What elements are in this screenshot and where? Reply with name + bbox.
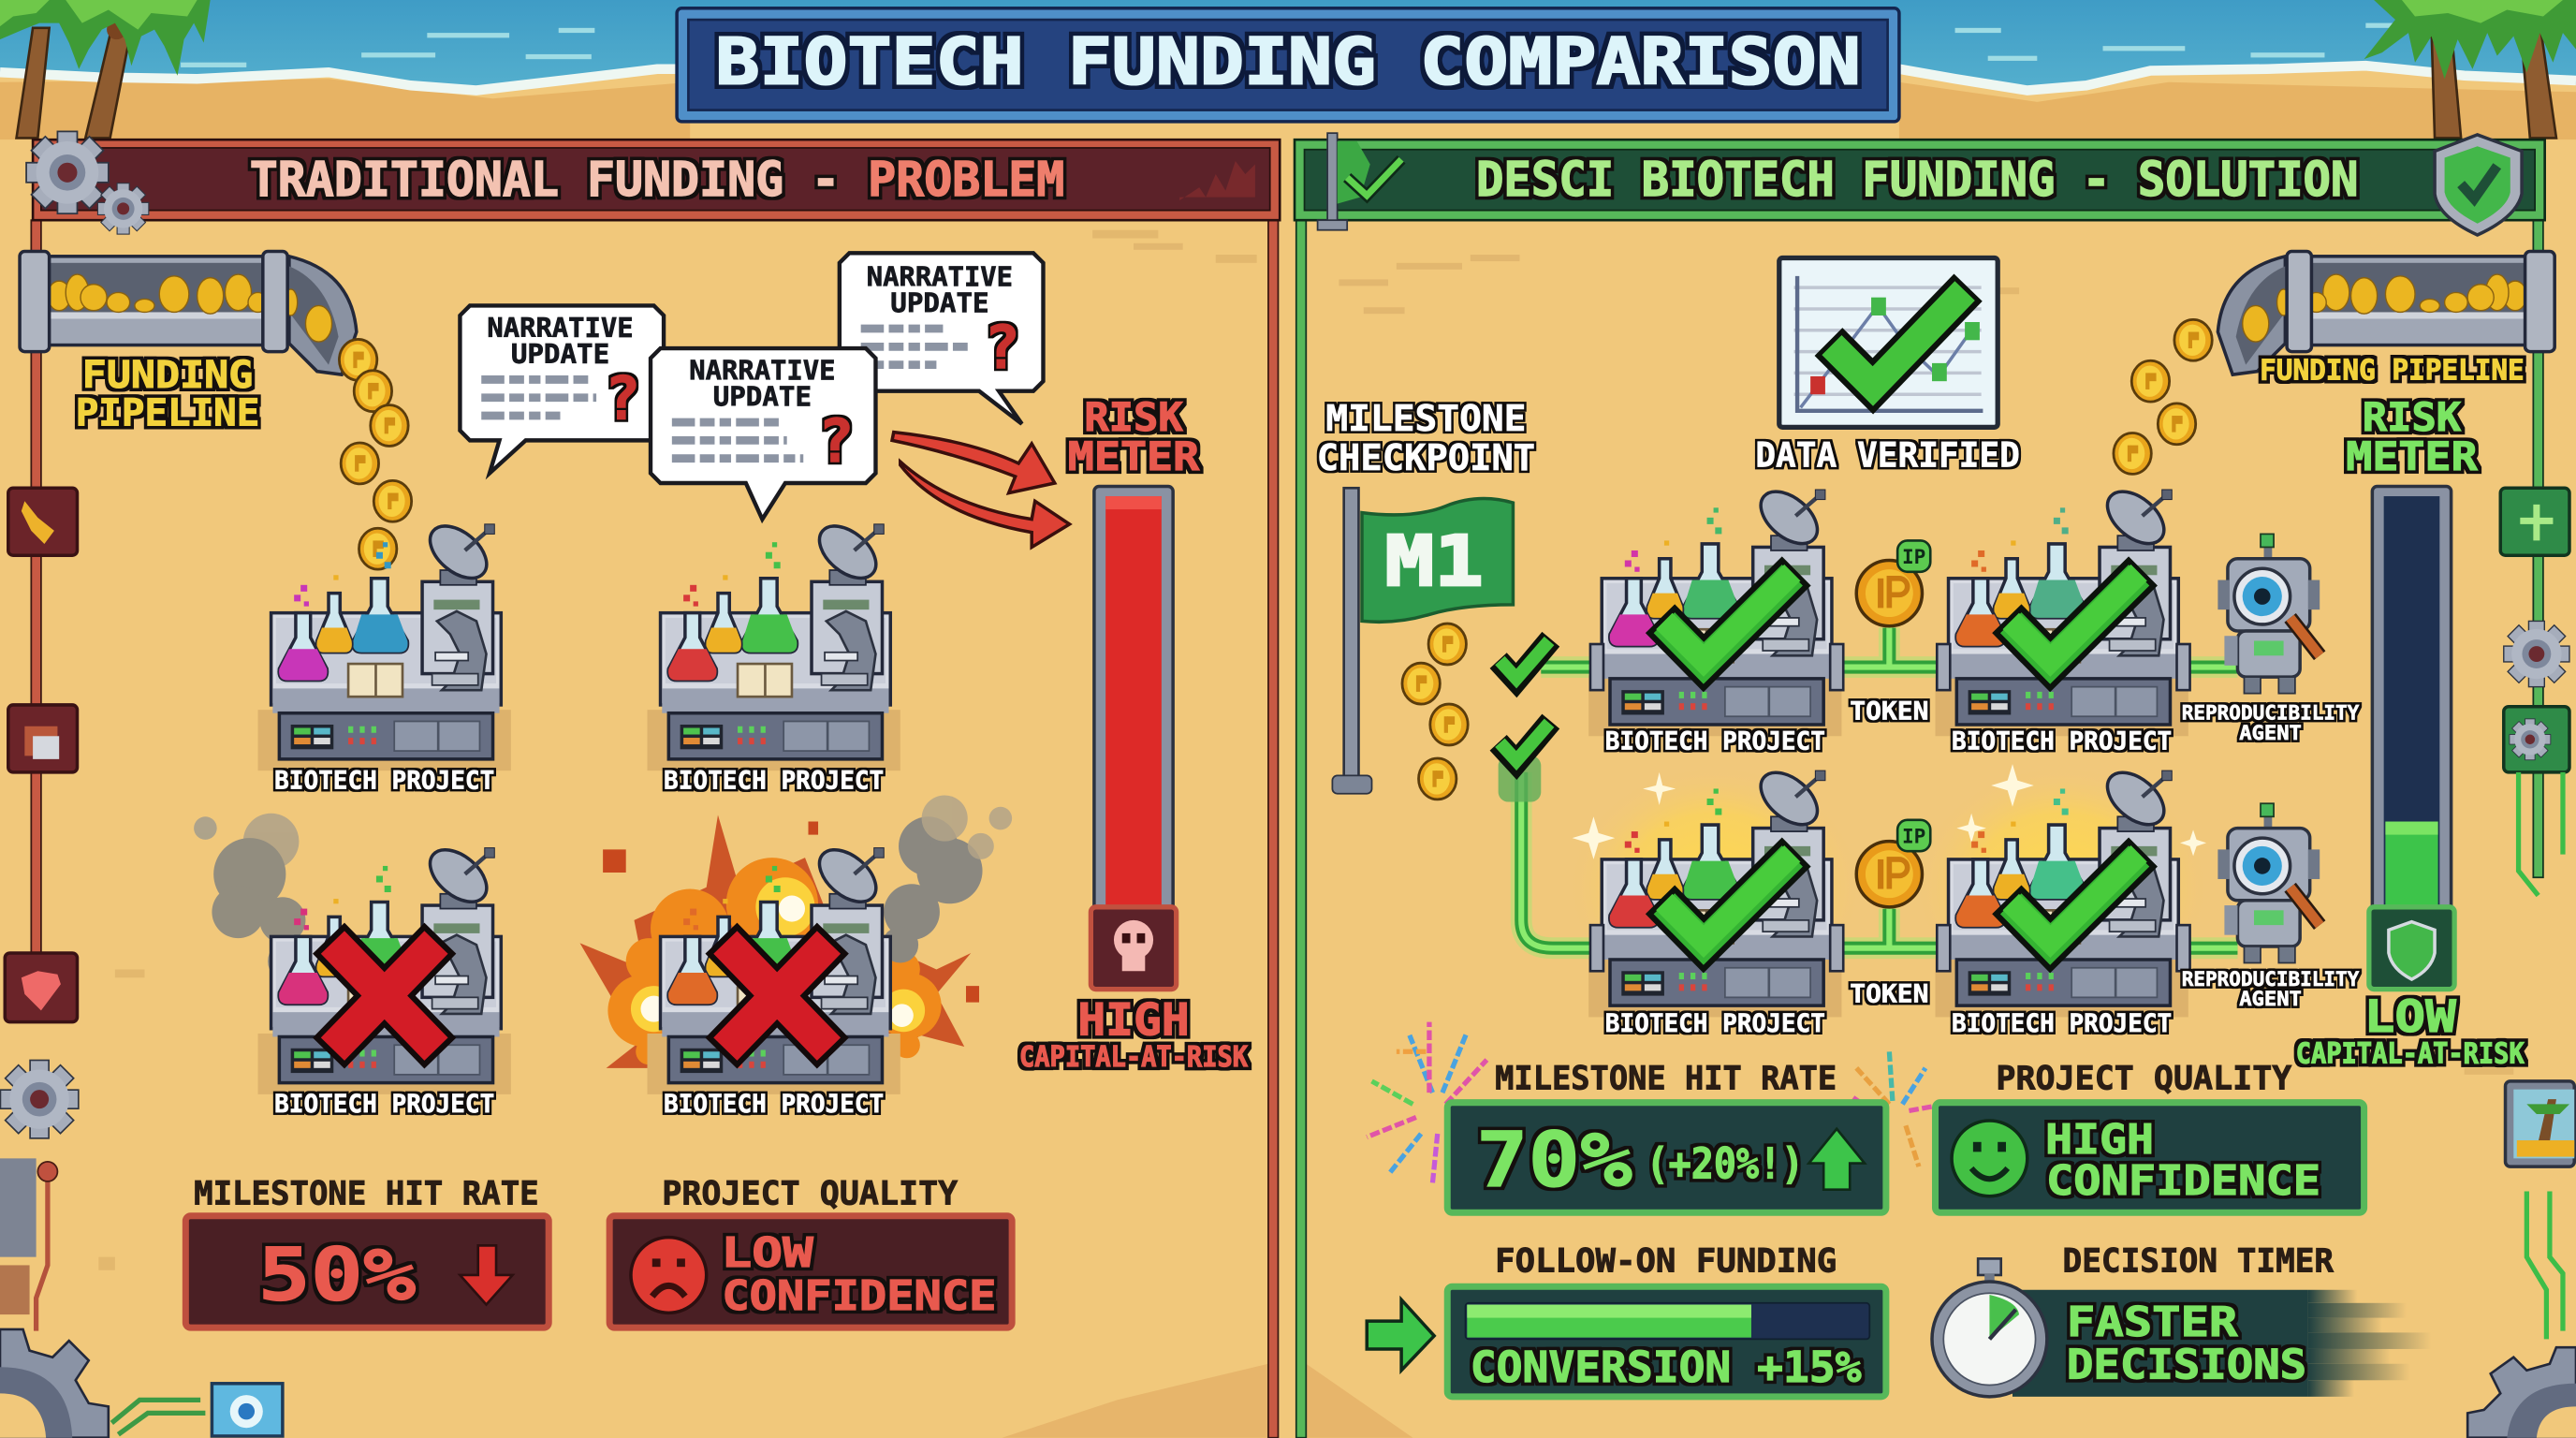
label: BIOTECH PROJECT — [274, 767, 494, 795]
skull icon box — [1090, 907, 1177, 990]
risk result left — [1019, 995, 1248, 1074]
darker sand corners — [1003, 1364, 1412, 1438]
funding pipeline label left — [76, 353, 259, 435]
gears on left header — [26, 131, 149, 234]
robot label row 1: REPRODUCIBILITY — [2182, 701, 2360, 725]
narrative bubble left — [460, 305, 664, 473]
metric: follow-on funding: CONVERSION +15% — [1471, 1343, 1862, 1392]
metric: project quality left: CONFIDENCE — [722, 1272, 996, 1320]
label: BIOTECH PROJECT — [1952, 727, 2172, 756]
funding pipeline label left: PIPELINE — [76, 391, 259, 435]
metric: project quality right — [1936, 1060, 2364, 1212]
check — [1661, 852, 1796, 944]
project row 2 b — [1936, 762, 2190, 1038]
palm trees right — [2364, 0, 2576, 138]
narrative bubble back right — [840, 253, 1043, 424]
metric: follow-on funding — [1447, 1241, 1886, 1397]
narrative bubble front: ? — [818, 406, 854, 476]
red x — [329, 938, 440, 1053]
metric: milestone hit rate left: 50% — [258, 1233, 416, 1317]
label: BIOTECH PROJECT — [1952, 1010, 2172, 1038]
metric: milestone hit rate right — [1447, 1060, 1886, 1212]
sand specks — [98, 230, 2513, 1270]
project row 2 a — [1588, 762, 1843, 1038]
metric: milestone hit rate right: 70% — [1476, 1117, 1632, 1205]
narrative bubble left: NARRATIVE — [487, 313, 634, 344]
token label row 2: TOKEN — [1850, 981, 1928, 1009]
metric: project quality left — [609, 1174, 1012, 1328]
shield icon box — [2369, 907, 2454, 990]
metric: decision timer: DECISION TIMER — [2063, 1241, 2334, 1280]
risk meter label left: METER — [1068, 433, 1200, 479]
metric: project quality left: PROJECT QUALITY — [662, 1174, 958, 1212]
data verified chart — [1779, 258, 1998, 427]
narrative bubble back right: ? — [985, 313, 1020, 382]
sad face — [631, 1238, 707, 1313]
robot label row 1: AGENT — [2239, 721, 2302, 744]
narrative bubble back right: NARRATIVE — [867, 261, 1013, 292]
red x — [721, 938, 833, 1053]
funding pipeline label left: FUNDING — [82, 353, 253, 397]
ip token row 2 — [1856, 820, 1930, 907]
metric: decision timer — [1932, 1241, 2432, 1397]
narrative bubble left: ? — [605, 364, 640, 433]
label: BIOTECH PROJECT — [1605, 1010, 1825, 1038]
narrative bubble back right: UPDATE — [890, 287, 989, 318]
label: BIOTECH PROJECT — [1605, 727, 1825, 756]
small check marks — [1499, 639, 1551, 801]
milestone flag m1: M1 — [1385, 522, 1484, 602]
ip token row 1 — [1856, 540, 1930, 626]
narrative bubble front: UPDATE — [713, 382, 812, 413]
smoke and explosion station 4 — [580, 795, 1012, 1068]
check — [2007, 571, 2144, 663]
robot row 2 — [2217, 803, 2320, 962]
ip token row 2: IP — [1902, 824, 1925, 847]
risk meter label right — [2346, 394, 2478, 479]
glow behind lower row — [1567, 764, 2210, 1010]
robot row 1 — [2217, 534, 2320, 694]
check — [2007, 852, 2144, 944]
milestone checkpoint label: MILESTONE — [1325, 398, 1526, 440]
falling coins right — [2114, 319, 2212, 474]
narrative bubble front — [651, 348, 875, 520]
risk meter label right: METER — [2346, 433, 2478, 479]
green connection wires — [1521, 627, 2237, 948]
stopwatch — [1932, 1258, 2047, 1397]
shield icon on header — [2435, 135, 2522, 235]
metric: decision timer: DECISIONS — [2067, 1342, 2306, 1389]
robot label row 2: AGENT — [2239, 987, 2302, 1010]
risk result right: LOW — [2364, 991, 2456, 1043]
risk result left: HIGH — [1077, 995, 1190, 1047]
station 2 — [648, 516, 900, 795]
risk meter bar right — [2369, 487, 2454, 990]
ip token row 1: IP — [1902, 545, 1925, 568]
red arrows to risk meter — [892, 433, 1070, 547]
robot label row 1 — [2182, 701, 2360, 744]
station 1 — [258, 516, 511, 795]
metric: milestone hit rate right: (+20%!) — [1647, 1138, 1804, 1188]
funding pipeline right — [2217, 252, 2554, 374]
metric: milestone hit rate left: MILESTONE HIT RATE — [194, 1174, 539, 1212]
project row 1 a — [1588, 481, 1843, 756]
milestone flag m1 — [1332, 488, 1513, 794]
label: BIOTECH PROJECT — [664, 1091, 884, 1119]
label: BIOTECH PROJECT — [274, 1091, 494, 1119]
project row 1 b — [1936, 481, 2190, 756]
metric: project quality left: LOW — [721, 1229, 814, 1277]
metric: decision timer: FASTER — [2067, 1299, 2238, 1346]
station 3 failed — [258, 840, 511, 1119]
narrative bubble left: UPDATE — [511, 339, 609, 370]
metric: project quality right: HIGH — [2045, 1116, 2154, 1164]
panel: traditional funding — [31, 139, 1280, 1438]
check — [1661, 571, 1796, 663]
robot label row 2 — [2182, 967, 2360, 1010]
arrow to follow-on funding — [1367, 1299, 1434, 1371]
decorative chart glyph — [1179, 161, 1255, 200]
data verified label: DATA VERIFIED — [1755, 434, 2020, 475]
risk result left: CAPITAL-AT-RISK — [1019, 1041, 1248, 1074]
funding pipeline label right: FUNDING PIPELINE — [2260, 354, 2525, 387]
risk result right — [2296, 991, 2525, 1071]
metric: project quality right: CONFIDENCE — [2046, 1157, 2320, 1205]
title banner — [677, 8, 1899, 122]
side icons left — [5, 488, 77, 1022]
risk meter label left: RISK — [1084, 394, 1183, 440]
side icons right — [2467, 488, 2576, 1438]
risk meter bar left — [1090, 487, 1177, 990]
coins near flag — [1402, 624, 1468, 800]
funding pipeline left — [20, 252, 357, 374]
milestone checkpoint label — [1317, 398, 1535, 479]
fireworks — [1367, 1022, 1945, 1183]
panel header text: traditional funding: TRADITIONAL FUNDING - PROBLEM — [250, 153, 1064, 208]
metric: milestone hit rate left — [185, 1174, 549, 1328]
milestone checkpoint label: CHECKPOINT — [1317, 437, 1535, 479]
robot label row 2: REPRODUCIBILITY — [2182, 967, 2360, 990]
risk result right: CAPITAL-AT-RISK — [2296, 1038, 2525, 1071]
palm trees left — [0, 0, 211, 138]
happy face — [1952, 1121, 2027, 1196]
falling coins left — [339, 339, 412, 569]
risk meter label left — [1068, 394, 1200, 479]
narrative bubble front: NARRATIVE — [689, 355, 835, 386]
metric: project quality right: PROJECT QUALITY — [1996, 1060, 2291, 1098]
smoke station 3 — [194, 814, 307, 981]
risk meter label right: RISK — [2363, 394, 2462, 440]
ocean — [0, 0, 2576, 94]
panel: desci funding — [1295, 139, 2545, 1438]
metric: follow-on funding: FOLLOW-ON FUNDING — [1495, 1241, 1837, 1280]
sand bands near shore — [0, 79, 2576, 139]
title text: BIOTECH FUNDING COMPARISON — [715, 25, 1861, 100]
metric: milestone hit rate right: MILESTONE HIT RATE — [1495, 1060, 1837, 1098]
flag and check icon on header — [1318, 133, 1401, 230]
panel header text: desci: DESCI BIOTECH FUNDING - SOLUTION — [1476, 153, 2358, 208]
label: BIOTECH PROJECT — [664, 767, 884, 795]
token label row 1: TOKEN — [1850, 698, 1928, 726]
lower left gears and circuits — [0, 1060, 283, 1438]
station 4 failed — [648, 840, 900, 1119]
